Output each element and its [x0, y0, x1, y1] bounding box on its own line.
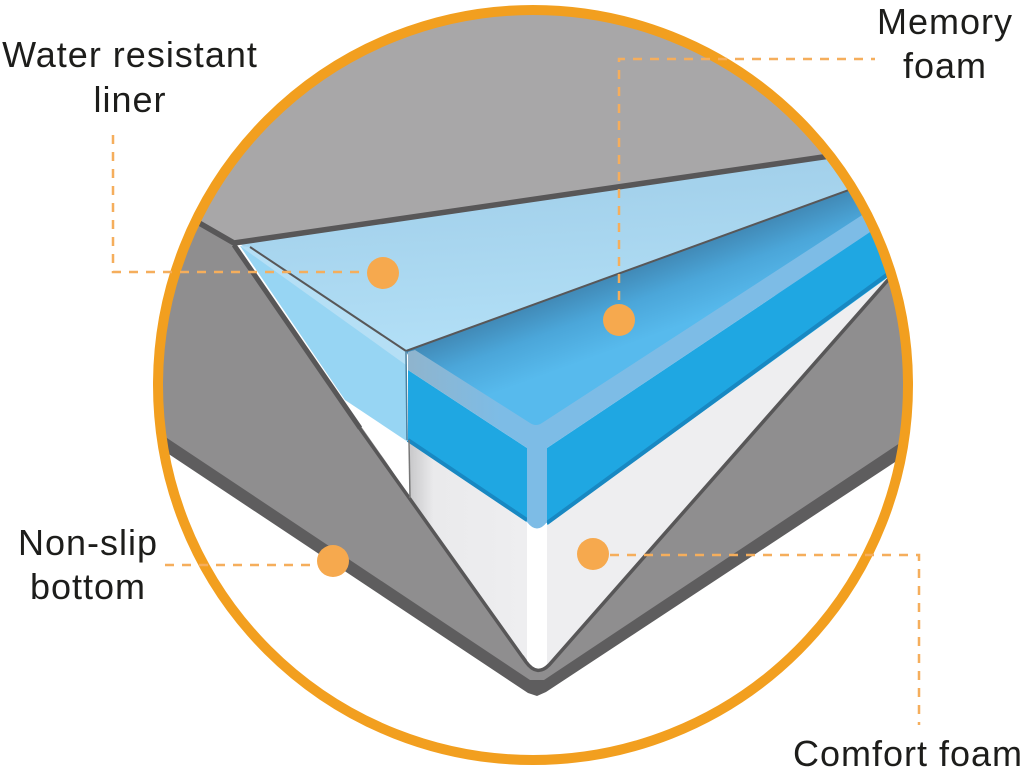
dark bottom band: [166, 438, 898, 696]
label: water resistant liner: liner: [93, 79, 167, 120]
memory foam right side: [547, 232, 887, 525]
comfort foam left face: [410, 440, 527, 660]
liner left side: [240, 246, 408, 442]
marker dot: liner: [367, 257, 399, 289]
marker dot: memory foam: [603, 304, 635, 336]
gray tip below the foam corner: [523, 655, 546, 680]
top gray cover: [201, 15, 822, 240]
memory foam top: [406, 191, 870, 425]
edge lines: [180, 156, 895, 670]
water resistant liner top: [240, 159, 848, 350]
orange circle outline: [158, 10, 908, 760]
right gray side: [548, 282, 903, 678]
comfort foam white corner: [527, 656, 547, 672]
liner left light band: [240, 246, 406, 365]
label: non-slip bottom: Non-slip: [18, 522, 158, 563]
label: memory foam: Memory: [877, 1, 1013, 42]
dashed leader: non-slip bottom: [165, 564, 318, 566]
dashed leader: water resistant liner: [113, 135, 366, 272]
translucent seam bands: [408, 215, 870, 528]
dashed leader: memory foam: [619, 59, 875, 300]
mattress cross-section: [140, 0, 930, 696]
memory foam left side: [408, 370, 527, 522]
left gray side: [163, 226, 527, 678]
label: water resistant liner: Water resistant: [2, 34, 258, 75]
dashed leader: comfort foam: [610, 555, 919, 725]
white comfort foam left sliver: [387, 463, 410, 495]
label: non-slip bottom: bottom: [30, 566, 146, 607]
label: memory foam: foam: [903, 45, 987, 86]
comfort foam right face: [547, 276, 886, 668]
memory foam dark lower edge: [408, 271, 892, 523]
marker dot: non-slip bottom: [317, 545, 349, 577]
marker dot: comfort foam: [577, 538, 609, 570]
